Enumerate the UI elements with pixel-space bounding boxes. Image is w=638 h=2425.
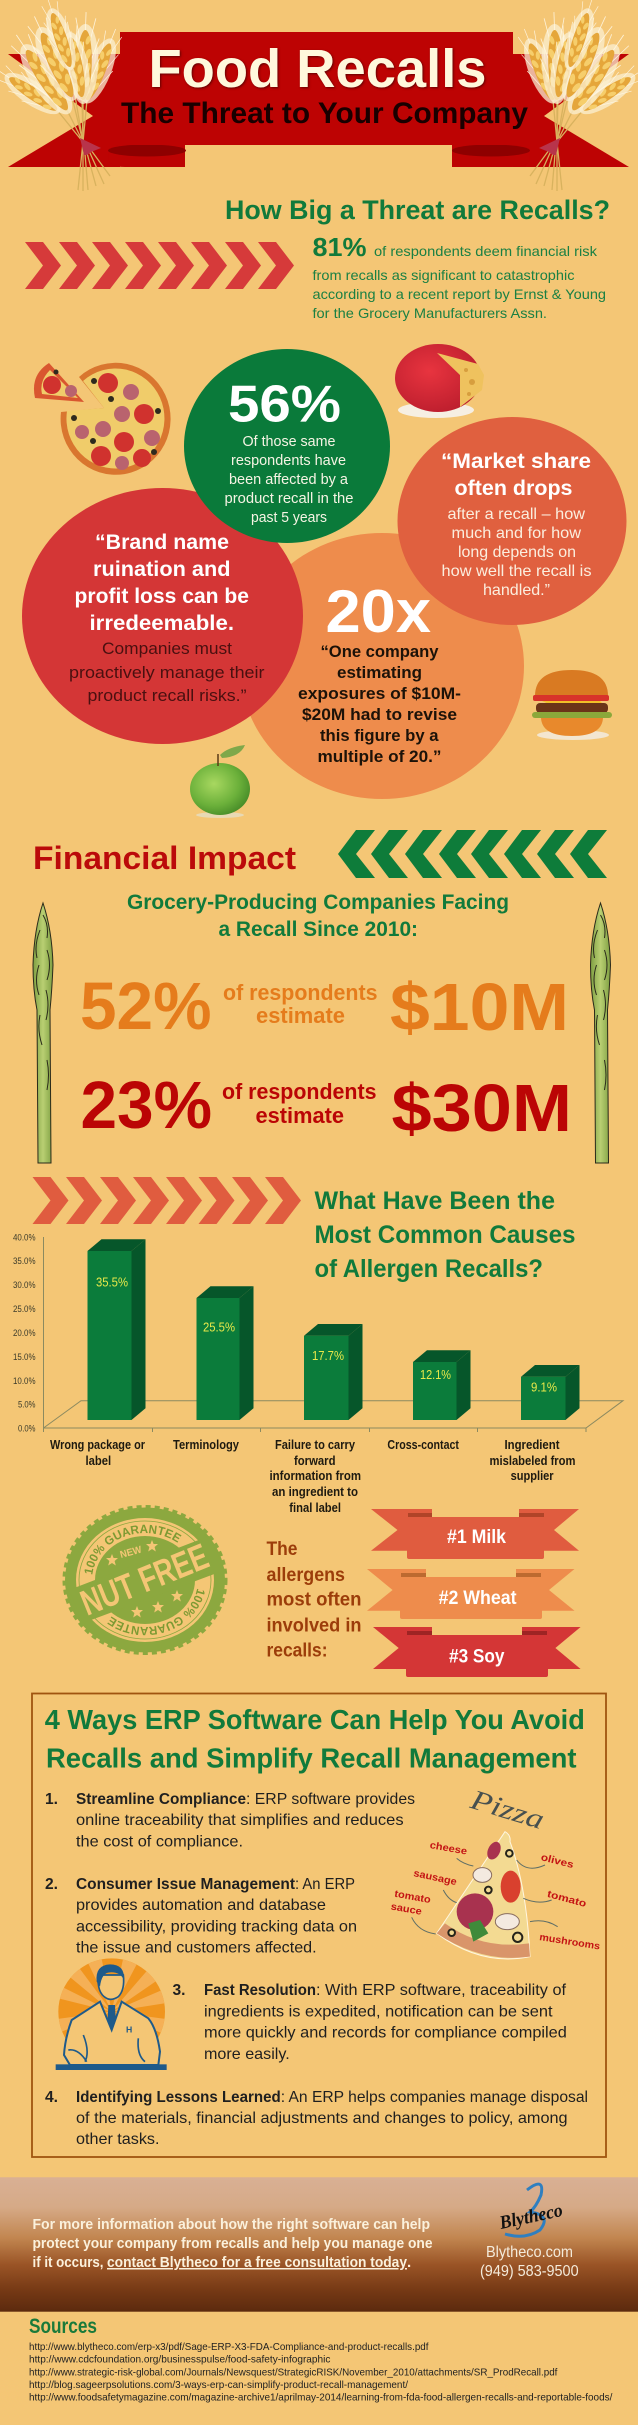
illustration: labelled pizza slice: mushrooms: [539, 1932, 601, 1953]
stamp: nut free: 100% GUARANTEE: [84, 1524, 182, 1574]
stat row: 52 percent 10M: 52%: [80, 969, 212, 1044]
ribbon: number 1 milk: #1 Milk: [447, 1527, 506, 1548]
source links: [29, 2341, 612, 2404]
text: brand name quote: irredeemable.: [90, 612, 234, 635]
text: 81 percent stat: for the Grocery Manufacturers Assn.: [312, 305, 547, 321]
bar: failure to carry forward: [304, 1324, 362, 1420]
text: 81 percent stat: according to a recent report by Ernst & Young: [312, 286, 606, 302]
category labels: Wrong package or: [50, 1437, 145, 1452]
stat row: 23 percent 30M: estimate: [256, 1103, 344, 1128]
text: 81 percent stat: [312, 232, 606, 321]
text: 81 percent stat: 81%: [312, 232, 366, 262]
call to action text: .: [407, 2254, 411, 2271]
banner ribbon shape: [8, 32, 629, 167]
item 3: fast resolution: [172, 1982, 567, 2063]
circles cluster: [22, 349, 626, 799]
text: market share quote: long depends on: [458, 544, 576, 561]
item 1: streamline compliance: : ERP software provides: [246, 1791, 415, 1808]
item 2: consumer issue management: Consumer Issue Management: [76, 1876, 296, 1893]
stat row: 52 percent 10M: estimate: [256, 1003, 345, 1028]
bar: wrong package: [88, 1239, 146, 1420]
contact details: Blytheco.com: [486, 2244, 573, 2261]
y axis labels: 20.0%: [13, 1328, 36, 1339]
source links: http://www.blytheco.com/erp-x3/pdf/Sage-ERP-X3-FDA-Compliance-and-product-recalls.pdf: [29, 2341, 429, 2353]
item 1: streamline compliance: Streamline Compliance: [76, 1791, 246, 1808]
bar: wrong package: 35.5%: [96, 1275, 128, 1290]
text: brand name quote: Companies must: [102, 639, 232, 658]
circle: 20x orange background: [240, 533, 524, 799]
circle: 56 percent: [184, 349, 390, 543]
text: 81 percent stat: of respondents deem financial risk: [374, 243, 598, 259]
icon: apple: [190, 745, 250, 818]
icon: left wheat: [0, 0, 128, 191]
ribbon: number 3 soy: [373, 1627, 581, 1677]
icon: left asparagus: [33, 903, 53, 1163]
bar: terminology: 25.5%: [203, 1320, 235, 1335]
text: 20x quote: “One company: [320, 642, 439, 661]
item 4: identifying lessons learned: [45, 2089, 588, 2148]
text: 20x quote: exposures of $10M-: [298, 684, 461, 703]
call to action text: if it occurs,: [32, 2254, 104, 2271]
call to action text: For more information about how the right software can help: [32, 2216, 430, 2233]
illustration: labelled pizza slice: Pizza: [466, 1784, 548, 1836]
text: allergens most often: [266, 1539, 362, 1662]
logo: Blytheco: Blytheco: [497, 2200, 565, 2234]
stamp: nut free: NUT FREE: [75, 1535, 214, 1623]
category labels: mislabeled from: [490, 1453, 576, 1468]
text: brand name quote: proactively manage their: [69, 663, 265, 682]
y axis labels: 15.0%: [13, 1352, 36, 1363]
text: market share quote: handled.”: [483, 582, 550, 599]
source links: http://www.strategic-risk-global.com/Journals/Newsquest/StrategicRISK/November_2010/attachments/SR_ProdRecall.pdf: [29, 2367, 557, 2379]
circle: market share: [398, 417, 626, 625]
y axis labels: 35.0%: [13, 1256, 36, 1267]
heading: common causes: What Have Been the: [314, 1187, 555, 1215]
category labels: information from: [270, 1468, 361, 1483]
text: brand name quote: [69, 531, 265, 705]
item 4: identifying lessons learned: 4.: [45, 2089, 58, 2106]
stat row: 23 percent 30M: [80, 1068, 572, 1146]
category labels: supplier: [511, 1468, 554, 1483]
stamp: nut free: [62, 1505, 228, 1655]
text: 20x quote: 20x: [326, 578, 431, 645]
illustration: labelled pizza slice: [390, 1784, 601, 1959]
item 4: identifying lessons learned: of the materials, financial adjustments and changes to policy, among: [76, 2110, 568, 2127]
stat row: 52 percent 10M: of respondents: [223, 980, 378, 1005]
illustration: man in lab coat: H: [126, 2024, 132, 2034]
chart axes and floor: [44, 1237, 623, 1432]
item 2: consumer issue management: 2.: [45, 1876, 58, 1893]
stat row: 23 percent 30M: $30M: [392, 1071, 572, 1146]
text: market share quote: “Market share: [441, 450, 591, 473]
text: 56 percent: respondents have: [231, 453, 346, 469]
category labels: Cross-contact: [387, 1437, 460, 1452]
stamp: nut free: NEW: [119, 1544, 144, 1561]
item 3: fast resolution: more easily.: [204, 2046, 290, 2063]
y axis labels: 40.0%: [13, 1232, 36, 1244]
title banner: [0, 0, 638, 191]
text: market share quote: often drops: [454, 477, 572, 500]
item 1: streamline compliance: online traceability that simplifies and reduces: [76, 1812, 404, 1829]
text: allergens most often: involved in: [266, 1616, 362, 1637]
text: allergens most often: allergens: [266, 1565, 345, 1586]
item 4: identifying lessons learned: : An ERP helps companies manage disposal: [281, 2089, 588, 2106]
text: 56 percent: 56%: [228, 376, 341, 434]
icon: right asparagus: [590, 903, 610, 1163]
panel: 4 ways ERP software: [32, 1694, 606, 2157]
category labels: final label: [289, 1500, 341, 1515]
text: 56 percent: product recall in the: [224, 491, 354, 507]
illustration: labelled pizza slice: sauce: [390, 1901, 423, 1918]
bar: terminology: [196, 1286, 254, 1420]
panel border: [32, 1694, 606, 2157]
category labels: Failure to carry: [275, 1437, 356, 1452]
item 4: identifying lessons learned: Identifying Lessons Learned: [76, 2089, 281, 2106]
text: brand name quote: profit loss can be: [74, 585, 249, 608]
text: allergens most often: most often: [266, 1590, 362, 1611]
item 4: identifying lessons learned: other tasks.: [76, 2131, 160, 2148]
stat row: 52 percent 10M: [80, 969, 569, 1045]
subheading: grocery companies: a Recall Since 2010:: [218, 918, 418, 941]
coral chevron arrows: [32, 1177, 301, 1224]
item 1: streamline compliance: [45, 1791, 415, 1851]
text: 20x quote: multiple of 20.”: [318, 747, 442, 766]
call to action text: [32, 2216, 432, 2271]
text: 56 percent: past 5 years: [251, 510, 327, 526]
category labels: Ingredient: [504, 1437, 560, 1452]
red chevron arrows: [25, 242, 294, 289]
footer band: call to action: [0, 2177, 638, 2312]
subheading: grocery companies: Grocery-Producing Companies Facing: [127, 891, 509, 914]
item 3: fast resolution: more quickly and records for compliance compiled: [204, 2025, 567, 2042]
item 2: consumer issue management: the issue and customers affected.: [76, 1940, 317, 1957]
item 1: streamline compliance: 1.: [45, 1791, 58, 1808]
text: brand name quote: product recall risks.”: [88, 686, 247, 705]
item 2: consumer issue management: accessibility, providing tracking data on: [76, 1919, 357, 1936]
text: allergens most often: The: [266, 1539, 298, 1560]
text: 20x quote: this figure by a: [320, 726, 439, 745]
call to action text: contact Blytheco for a free consultation today: [107, 2254, 408, 2271]
y axis labels: 0.0%: [18, 1424, 36, 1434]
text: 56 percent: been affected by a: [229, 472, 349, 488]
heading: financial impact: Financial Impact: [33, 840, 296, 876]
text: market share quote: much and for how: [452, 525, 581, 542]
category labels: Terminology: [173, 1437, 240, 1452]
item 1: streamline compliance: the cost of compliance.: [76, 1834, 243, 1851]
text: market share quote: after a recall – how: [448, 506, 585, 523]
text: 56 percent: Of those same: [242, 434, 336, 450]
illustration: man in lab coat: [56, 1958, 167, 2070]
text: market share quote: how well the recall is: [442, 563, 592, 580]
item 2: consumer issue management: provides automation and database: [76, 1897, 326, 1914]
illustration: labelled pizza slice: sausage: [412, 1868, 458, 1888]
panel heading: Recalls and Simplify Recall Management: [46, 1743, 576, 1774]
heading: common causes: of Allergen Recalls?: [314, 1255, 543, 1283]
subheading: grocery companies: [127, 891, 509, 941]
ribbon: number 2 wheat: #2 Wheat: [439, 1588, 517, 1609]
y axis labels: 30.0%: [13, 1280, 36, 1291]
stat row: 23 percent 30M: of respondents: [222, 1079, 376, 1104]
illustration: labelled pizza slice: tomato: [546, 1889, 587, 1910]
bar: failure to carry forward: 17.7%: [312, 1348, 344, 1363]
stat row: 23 percent 30M: 23%: [80, 1068, 212, 1143]
bar: ingredient mislabeled: 9.1%: [531, 1380, 557, 1395]
heading: how big a threat: How Big a Threat are Recalls?: [225, 195, 610, 225]
bar: ingredient mislabeled: [521, 1365, 580, 1420]
stamp: nut free: 100% GUARANTEE: [107, 1588, 204, 1636]
stat row: 52 percent 10M: $10M: [390, 970, 569, 1045]
text: brand name quote: ruination and: [93, 558, 230, 581]
bar: cross-contact: 12.1%: [420, 1367, 451, 1382]
heading: common causes: Most Common Causes: [314, 1221, 576, 1249]
category labels: forward: [294, 1453, 336, 1468]
text: 56 percent: [224, 376, 354, 526]
illustration: labelled pizza slice: tomato: [393, 1889, 431, 1906]
icon: burger: [532, 670, 612, 740]
contact details: [480, 2244, 579, 2280]
category labels: [50, 1437, 576, 1515]
item 3: fast resolution: : With ERP software, traceability of: [316, 1982, 567, 1999]
source links: http://www.cdcfoundation.org/businesspulse/food-safety-infographic: [29, 2354, 330, 2366]
sources heading: Sources: [29, 2315, 97, 2338]
logo: Blytheco: [497, 2184, 565, 2236]
sources: [29, 2315, 612, 2404]
illustration: labelled pizza slice: cheese: [429, 1840, 468, 1858]
illustration: labelled pizza slice: olives: [540, 1852, 575, 1871]
ribbon: number 1 milk: [371, 1509, 579, 1559]
item 3: fast resolution: ingredients is expedited, notification can be sent: [204, 2004, 553, 2021]
source links: http://www.foodsafetymagazine.com/magazine-archive1/aprilmay-2014/learning-from-fda-food-allergen-recalls-and-reportable-foods/: [29, 2392, 612, 2404]
contact details: (949) 583-9500: [480, 2263, 579, 2280]
panel heading: 4 Ways ERP Software Can Help You Avoid: [45, 1704, 585, 1735]
bar chart: allergen recall causes: [13, 1232, 623, 1515]
y axis labels: [13, 1232, 36, 1434]
main title: Food Recalls: [148, 39, 487, 99]
text: 20x quote: $20M had to revise: [302, 705, 457, 724]
green chevron arrows: [338, 830, 607, 878]
call to action text: protect your company from recalls and help you manage one: [32, 2235, 432, 2252]
category labels: label: [86, 1453, 111, 1468]
ribbon: number 3 soy: #3 Soy: [449, 1647, 505, 1668]
bar: cross-contact: [413, 1350, 470, 1420]
item 3: fast resolution: 3.: [172, 1982, 186, 1999]
text: allergens most often: recalls:: [266, 1641, 328, 1662]
text: 81 percent stat: from recalls as significant to catastrophic: [312, 267, 574, 283]
icon: cheese wheel: [395, 344, 484, 418]
panel heading: [45, 1704, 585, 1774]
text: market share quote: [441, 450, 592, 599]
text: 20x quote: [298, 578, 461, 766]
y axis labels: 5.0%: [18, 1400, 36, 1410]
category labels: an ingredient to: [272, 1484, 358, 1499]
text: 20x quote: estimating: [337, 663, 422, 682]
icon: pizza: [34, 363, 171, 475]
source links: http://blog.sageerpsolutions.com/3-ways-erp-can-simplify-product-recall-management/: [29, 2379, 408, 2391]
y axis labels: 25.0%: [13, 1304, 36, 1315]
heading: common causes: [314, 1187, 576, 1283]
item 3: fast resolution: Fast Resolution: [204, 1982, 316, 1999]
y axis labels: 10.0%: [13, 1376, 36, 1387]
icon: right wheat: [512, 0, 638, 191]
item 2: consumer issue management: : An ERP: [295, 1876, 355, 1893]
circle: brand name: [22, 488, 303, 744]
text: brand name quote: “Brand name: [95, 531, 229, 554]
subtitle: The Threat to Your Company: [121, 97, 528, 130]
item 2: consumer issue management: [45, 1876, 357, 1957]
ribbon: number 2 wheat: [367, 1569, 574, 1619]
